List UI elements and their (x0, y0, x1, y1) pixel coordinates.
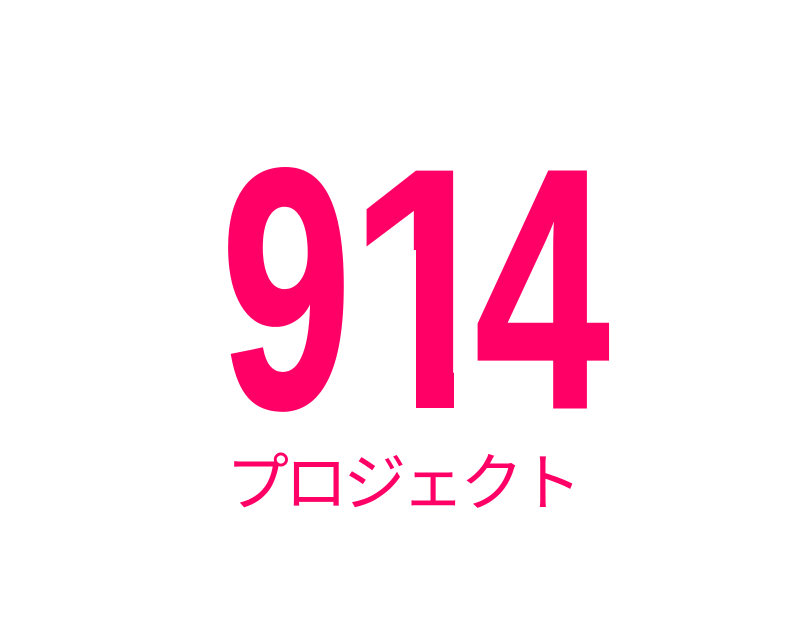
number 914: 9 (221, 99, 351, 480)
number 914: 1 (347, 97, 506, 482)
number 914 (228, 167, 610, 412)
logo graphic (228, 167, 610, 508)
number 914: 4 (475, 98, 611, 480)
label: project: プロジェクト (226, 449, 582, 519)
